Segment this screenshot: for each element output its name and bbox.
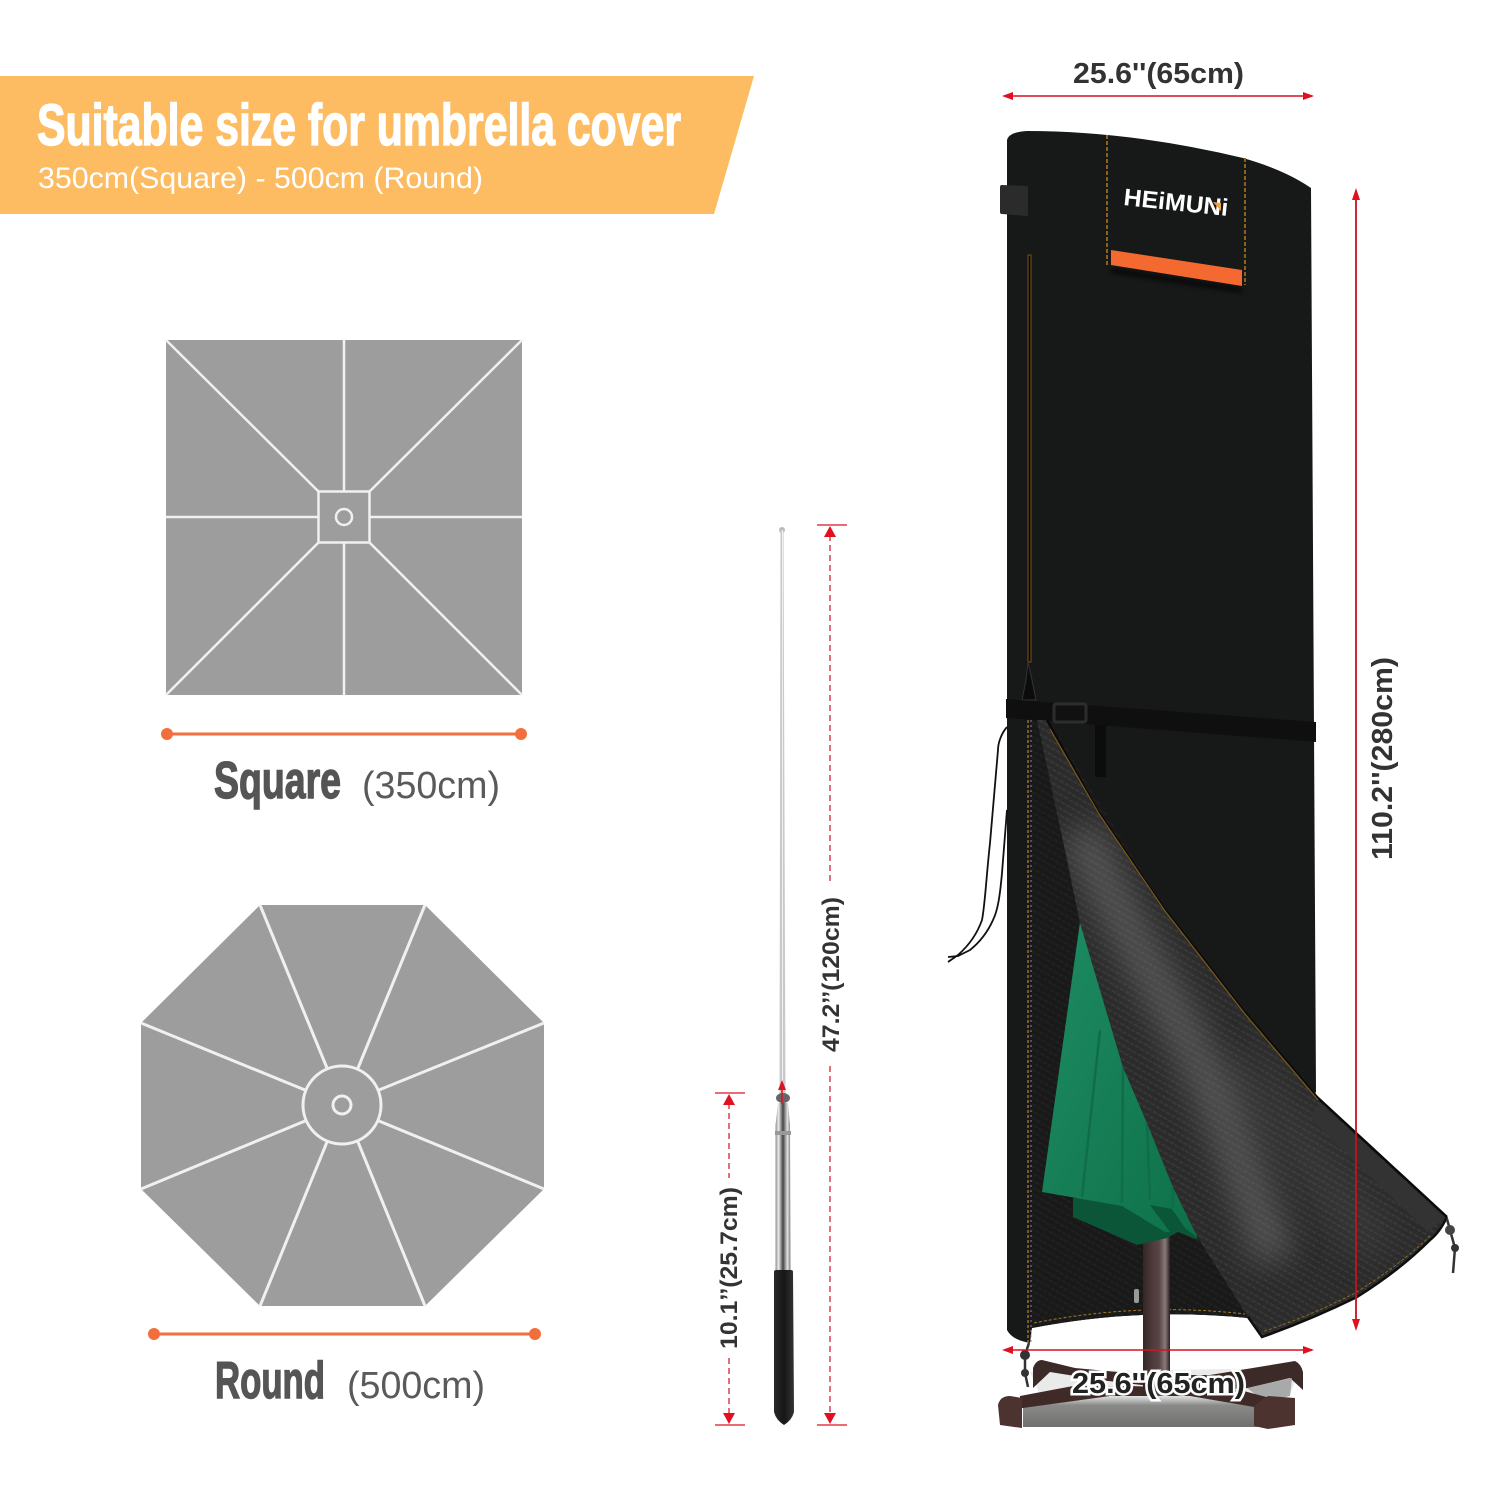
drawcord [948,727,1007,962]
telescopic pole [774,527,794,1425]
zipper top [1028,255,1031,662]
dimension: square width line [161,728,527,740]
flap hem [1248,1217,1447,1337]
dimension: 10.1 inch: 10.1’’(25.7cm) [716,1187,743,1349]
dimension: 47.2 inch: 47.2’’(120cm) [818,897,845,1052]
dimension: 10.1 inch [715,1080,786,1425]
cover interior [1032,722,1248,1328]
diagram: round umbrella [141,905,544,1306]
dimension: height [1352,188,1399,1331]
dimension: bottom width [1002,1346,1314,1400]
dimension: top width: 25.6''(65cm) [1073,58,1244,90]
label: round 500cm: (500cm) [347,1365,485,1407]
flap reinforcement band [1310,1103,1445,1232]
label: square 350cm: Square [214,752,341,810]
zipper lower stitching [1027,720,1029,1343]
dimension: bottom width: 25.6''(65cm) [1072,1368,1245,1400]
label: square 350cm [214,752,500,810]
dimension: top width [1002,58,1314,100]
product: black cover [948,131,1316,1343]
flap sheen [1080,830,1380,1260]
side strap [1000,185,1028,216]
inner hem stitching [1034,1310,1245,1323]
dimension: 47.2 inch [817,525,847,1425]
umbrella pole [1134,1236,1170,1396]
logo pocket stitching [1107,135,1245,285]
reflective strip shadow [1111,268,1242,293]
zipper pull [1022,662,1036,700]
brand logo: HEiMUNi [1122,184,1230,222]
corner toggle [1445,1219,1459,1273]
belt with buckle [1006,699,1316,777]
diagram: square umbrella [166,340,522,695]
umbrella base stand [998,1360,1303,1429]
lower toggle [1020,1343,1030,1387]
label: round 500cm: Round [215,1352,325,1410]
banner: title ribbon [0,76,754,214]
open cover flap [1037,720,1447,1337]
dimension: height: 110.2''(280cm) [1367,657,1399,860]
flap seam [1047,720,1447,1217]
subheading: size range: 350cm(Square) - 500cm (Round) [38,162,483,195]
label: round 500cm [215,1352,485,1410]
green umbrella canopy [1042,922,1198,1245]
label: square 350cm: (350cm) [362,765,500,807]
back arm of base [1033,1360,1303,1392]
reflective strip [1111,250,1242,286]
dimension: round width line [148,1328,541,1340]
heading: suitable size: Suitable size for umbrella cover [37,93,681,158]
